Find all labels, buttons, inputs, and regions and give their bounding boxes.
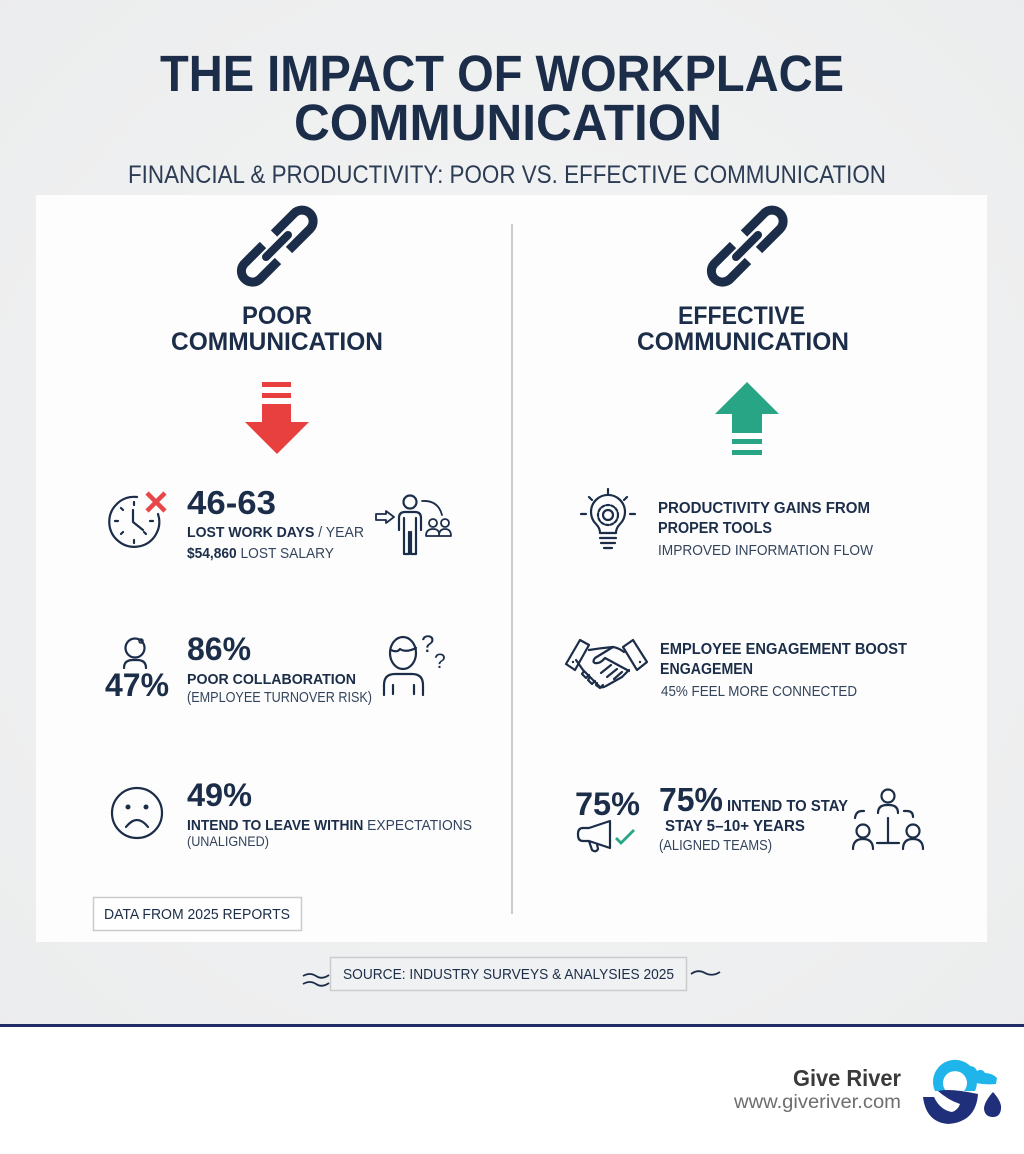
icon: confused person: ?	[421, 631, 434, 658]
stat: productivity gains: PROPER TOOLS	[658, 520, 772, 537]
footer	[0, 1024, 1024, 1154]
stat: lost work days: $54,860 LOST SALARY	[187, 545, 334, 562]
heading: poor communication: COMMUNICATION	[171, 328, 383, 356]
icon: person with group	[376, 496, 451, 554]
stat: intend to stay: INTEND TO STAY	[727, 798, 849, 815]
icon: megaphone with check: 75%	[575, 786, 640, 822]
stat: productivity gains	[581, 489, 873, 559]
stat: intend to leave: (UNALIGNED)	[187, 833, 269, 849]
icon: confused person	[384, 631, 446, 695]
stat: intend to stay	[575, 781, 923, 854]
icon: red down arrow	[245, 382, 309, 454]
icon: sad face	[112, 788, 162, 838]
heading: poor communication	[171, 302, 383, 356]
icon: person 47 percent	[105, 638, 169, 703]
icon: handshake	[566, 640, 647, 688]
icon: light bulb with gear	[581, 489, 635, 548]
heading: effective communication: EFFECTIVE	[678, 302, 805, 330]
stat: poor collaboration: (EMPLOYEE TURNOVER RISK)	[187, 689, 372, 706]
panel: comparison	[36, 195, 987, 942]
stat: intend to leave: INTEND TO LEAVE WITHIN EXPECTATIONS	[187, 817, 472, 834]
stat: lost work days: LOST WORK DAYS / YEAR	[187, 524, 364, 541]
stat: productivity gains: IMPROVED INFORMATION FLOW	[658, 543, 873, 559]
stat: productivity gains: PRODUCTIVITY GAINS FROM	[658, 500, 870, 517]
title: COMMUNICATION	[294, 94, 722, 151]
heading: effective communication: COMMUNICATION	[637, 328, 849, 356]
stat: intend to stay: 75%	[659, 781, 723, 818]
heading: effective communication	[637, 302, 849, 356]
icon: chain link effective	[711, 210, 783, 282]
center divider	[511, 224, 513, 914]
stat: poor collaboration	[105, 631, 446, 706]
logo	[923, 1060, 1001, 1124]
icon: chain link poor	[241, 210, 313, 282]
stat: lost work days: 46-63	[187, 484, 276, 521]
stat: employee engagement: EMPLOYEE ENGAGEMENT BOOST	[660, 641, 907, 658]
icon: confused person: ?	[434, 650, 446, 673]
stat: lost work days	[109, 484, 451, 562]
stat: intend to stay: STAY 5–10+ YEARS	[665, 818, 805, 835]
stat: intend to stay: (ALIGNED TEAMS)	[659, 838, 772, 854]
stat: poor collaboration: POOR COLLABORATION	[187, 671, 356, 688]
heading: poor communication: POOR	[242, 302, 312, 330]
source badge: SOURCE: INDUSTRY SURVEYS & ANALYSIES 2025	[343, 966, 674, 983]
stat: intend to leave: 49%	[187, 777, 252, 813]
title: THE IMPACT OF WORKPLACE	[160, 45, 844, 102]
icon: person 47 percent: 47%	[105, 667, 169, 703]
stat: employee engagement: ENGAGEMEN	[660, 661, 753, 678]
badge: data from 2025 reports: DATA FROM 2025 REPORTS	[104, 906, 290, 923]
stat: employee engagement	[566, 640, 907, 700]
source badge	[303, 958, 720, 990]
icon: team hierarchy	[853, 790, 923, 849]
icon: clock with x	[109, 493, 165, 547]
stat: poor collaboration: 86%	[187, 631, 251, 667]
brand url: www.giveriver.com	[733, 1091, 901, 1113]
stat: intend to leave	[112, 777, 472, 849]
icon: megaphone with check	[575, 786, 640, 851]
brand name: Give River	[793, 1065, 901, 1091]
stat: employee engagement: 45% FEEL MORE CONNECTED	[661, 684, 857, 700]
icon: green up arrow	[715, 382, 779, 455]
subtitle: FINANCIAL & PRODUCTIVITY: POOR VS. EFFECTIVE COMMUNICATION	[128, 161, 886, 189]
title	[160, 45, 844, 151]
badge: data from 2025 reports	[94, 898, 302, 930]
